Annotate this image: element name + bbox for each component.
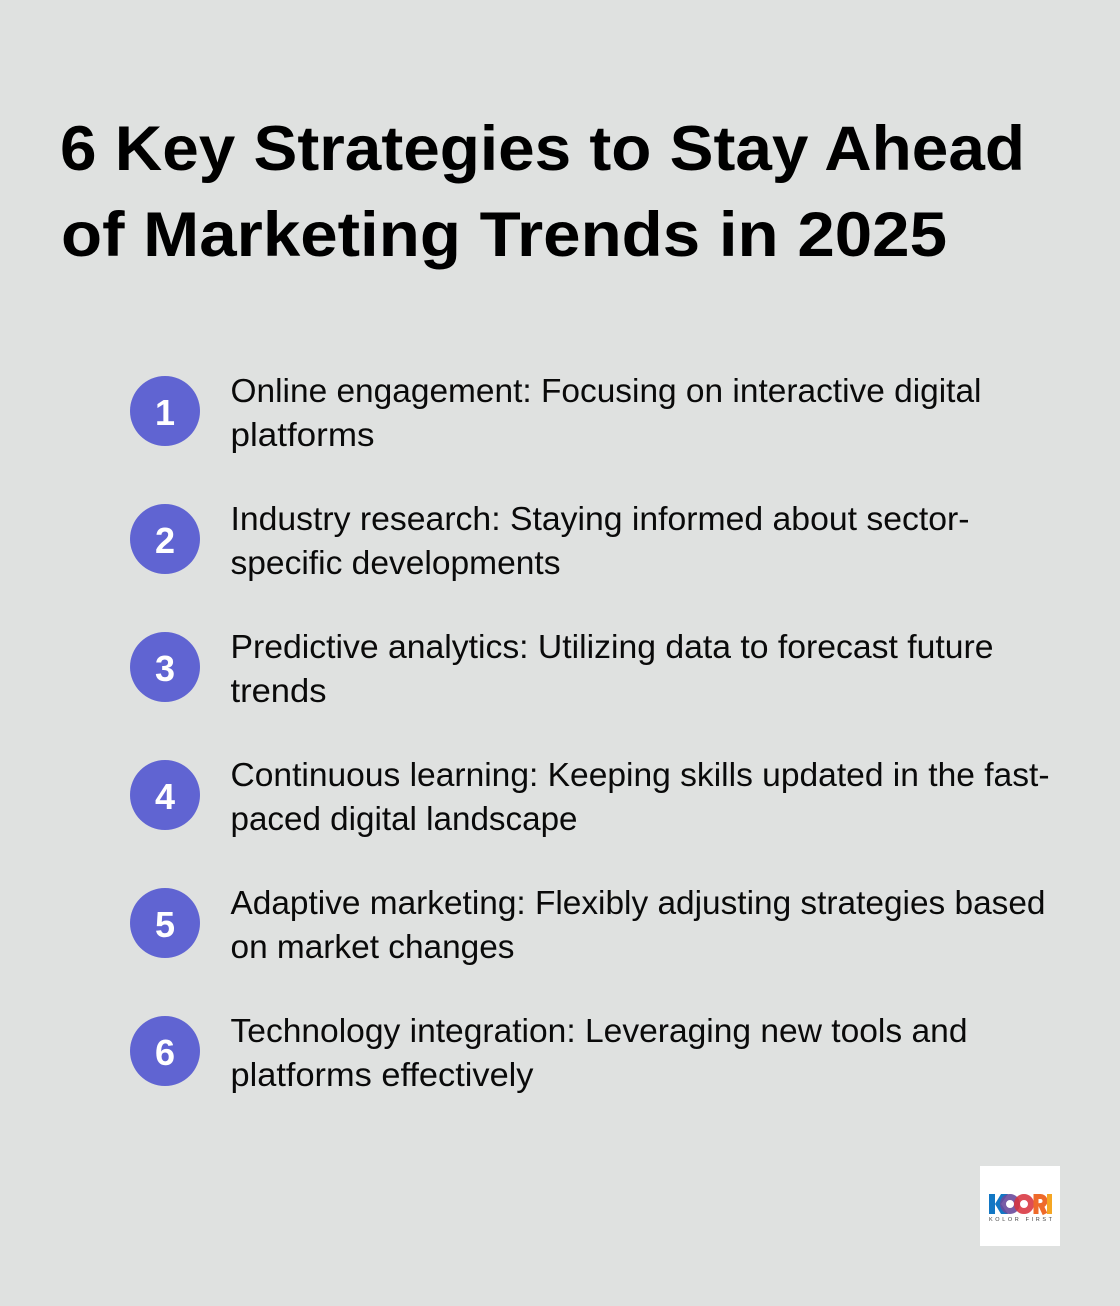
item 3 text: Predictive analytics: Utilizing data to forecast future xyxy=(230,628,994,665)
list item 6 xyxy=(130,1012,968,1093)
item 1 text xyxy=(230,372,982,453)
list item 4 xyxy=(130,756,1050,837)
number badge 1: 1 xyxy=(155,392,175,433)
number badge 5 xyxy=(130,888,200,958)
number badge 2: 2 xyxy=(155,520,175,561)
number badge 6 xyxy=(130,1016,200,1086)
logo letters O O xyxy=(1003,1197,1031,1211)
item 6 text: Technology integration: Leveraging new tools and xyxy=(230,1012,968,1049)
number badge 3 xyxy=(130,632,200,702)
number badge 1 xyxy=(130,376,200,446)
item 4 text xyxy=(230,756,1050,837)
item 1 text: Online engagement: Focusing on interactive digital xyxy=(230,372,982,409)
title: 6 Key Strategies to Stay Ahead xyxy=(60,114,1025,184)
logo: Koor1 Kolor First xyxy=(980,1166,1060,1246)
item 5 text: on market changes xyxy=(230,928,514,965)
list item 2 xyxy=(130,500,970,581)
item 5 text: Adaptive marketing: Flexibly adjusting strategies based xyxy=(230,884,1046,921)
item 2 text: specific developments xyxy=(230,544,560,581)
item 5 text xyxy=(230,884,1046,965)
logo tagline: KOLOR FIRST xyxy=(989,1217,1053,1223)
item 4 text: paced digital landscape xyxy=(230,800,578,837)
item 2 text: Industry research: Staying informed about sector- xyxy=(230,500,970,537)
number badge 3: 3 xyxy=(155,648,175,689)
item 3 text: trends xyxy=(230,672,326,709)
number badge 5: 5 xyxy=(155,904,175,945)
item 3 text xyxy=(230,628,994,709)
title xyxy=(60,114,1025,270)
number badge 6: 6 xyxy=(155,1032,175,1073)
item 6 text xyxy=(230,1012,968,1093)
logo letter K xyxy=(989,1194,1008,1214)
item 2 text xyxy=(230,500,970,581)
number badge 4 xyxy=(130,760,200,830)
list item 5 xyxy=(130,884,1046,965)
title: of Marketing Trends in 2025 xyxy=(61,200,947,270)
item 1 text: platforms xyxy=(230,416,374,453)
list item 1 xyxy=(130,372,982,453)
number badge 4: 4 xyxy=(155,776,175,817)
number badge 2 xyxy=(130,504,200,574)
list item 3 xyxy=(130,628,994,709)
logo letters R 1 xyxy=(1036,1194,1052,1214)
item 6 text: platforms effectively xyxy=(230,1056,534,1093)
item 4 text: Continuous learning: Keeping skills updated in the fast- xyxy=(230,756,1050,793)
